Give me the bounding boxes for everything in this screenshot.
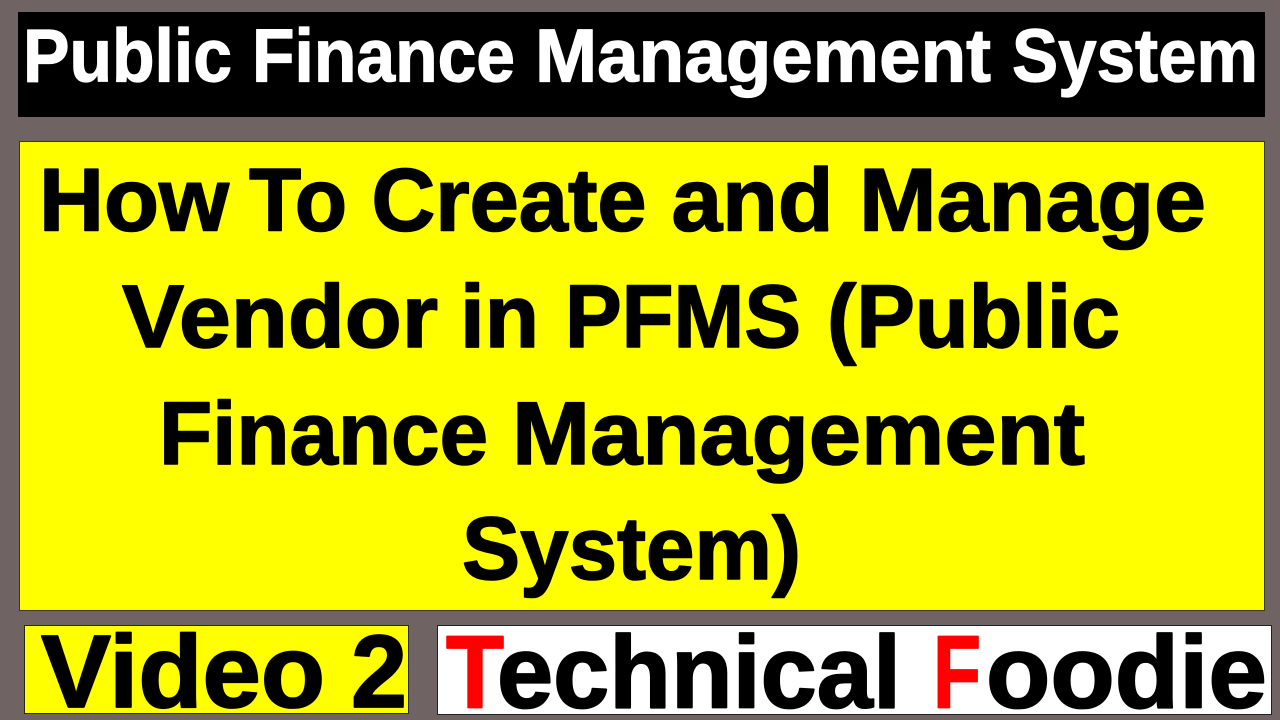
heading line 2: Vendor xyxy=(122,266,438,366)
heading line 1: How xyxy=(39,150,230,250)
heading line 1: Manage xyxy=(859,150,1206,250)
title banner xyxy=(18,12,1265,117)
heading line 2: in xyxy=(460,266,539,366)
heading line 2: PFMS xyxy=(565,266,801,366)
title text: Public xyxy=(23,14,232,98)
main yellow panel xyxy=(20,142,1264,610)
heading line 1 xyxy=(39,150,1206,250)
heading line 2: (Public xyxy=(827,266,1120,366)
heading line 3 xyxy=(159,383,1085,483)
channel name text xyxy=(446,614,1267,720)
heading line 3: Management xyxy=(512,383,1085,483)
title text: System xyxy=(1012,14,1258,98)
heading line 3: Finance xyxy=(159,383,488,483)
channel name badge xyxy=(438,614,1272,720)
title text: Management xyxy=(535,14,991,98)
heading line 4: System) xyxy=(462,498,801,598)
title text: Finance xyxy=(252,14,515,98)
heading line 2 xyxy=(122,266,1120,366)
heading line 1: Create xyxy=(372,150,646,250)
heading line 1: and xyxy=(672,150,834,250)
title text xyxy=(23,14,1258,98)
heading line 1: To xyxy=(249,150,347,250)
video number badge xyxy=(24,614,408,720)
